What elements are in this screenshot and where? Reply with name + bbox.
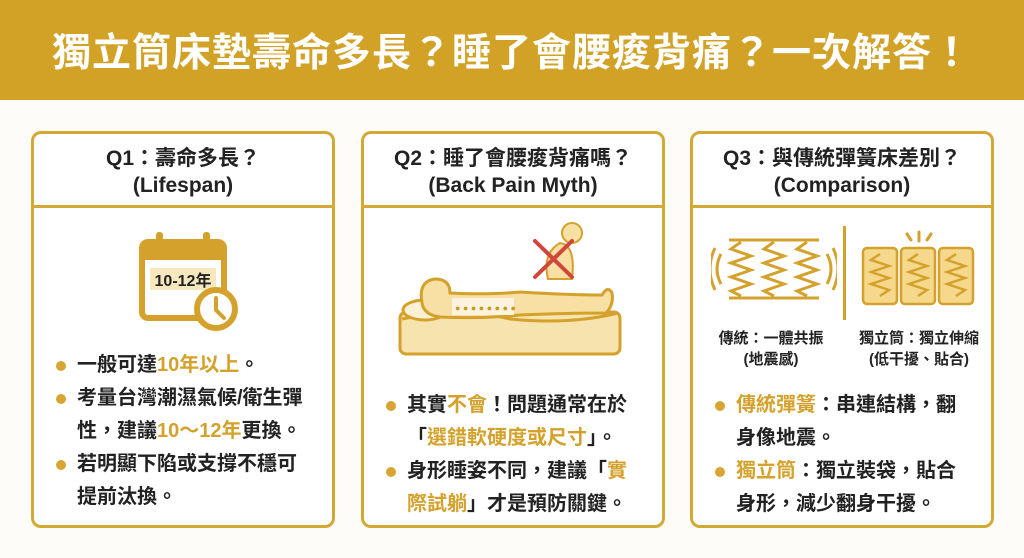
bullets Q3 [715,394,956,515]
panel heading Q3: Q3：與傳統彈簧床差別？ [723,147,961,170]
bullets Q2 [386,394,627,515]
panel: Q3 comparison [690,131,994,528]
icon: person lying on mattress [398,222,622,356]
bullets Q1: 考量台灣潮濕氣候/衛生彈 [77,387,303,409]
panel heading Q1 [34,134,332,208]
bullets Q3: 獨立筒：獨立裝袋，貼合 [736,460,956,482]
bullets Q1: 提前汰換。 [77,486,177,508]
header band [0,0,1024,100]
caption pocket: (低干擾、貼合) [869,351,969,368]
caption pocket [859,330,979,368]
bullets Q1: 若明顯下陷或支撐不穩可 [77,453,297,475]
panel: Q2 back pain [361,131,665,528]
panel heading Q3 [693,134,991,208]
divider [843,226,846,320]
caption traditional: 傳統：一體共振 [718,330,824,347]
panel heading Q1: Q1：壽命多長？ [106,147,260,170]
bullets Q1 [56,354,303,508]
bullets Q2: 際試躺」才是預防關鍵。 [407,493,627,515]
bullets Q2: 「選錯軟硬度或尺寸」。 [407,427,617,449]
bullets Q2: 身形睡姿不同，建議「實 [407,460,627,482]
panel heading Q2: Q2：睡了會腰痠背痛嗎？ [394,147,632,170]
bullets Q3: 身形，減少翻身干擾。 [736,493,936,515]
bullets Q1: 一般可達10年以上。 [77,354,259,376]
icon: traditional connected springs [711,238,837,300]
bullets Q2: 其實不會！問題通常在於 [407,394,627,416]
panel heading Q3: (Comparison) [774,174,910,197]
caption traditional: (地震感) [744,351,798,368]
icon: calendar with clock: 10-12年 [155,271,211,290]
bullets Q3: 身像地震。 [736,427,836,449]
panel heading Q2 [364,134,662,208]
panel heading Q2: (Back Pain Myth) [428,174,598,197]
icon: person lying on mattress: ● ● ● ● ● ● ● ● [455,303,516,313]
panel heading Q1: (Lifespan) [133,174,233,197]
caption traditional [718,330,824,368]
bullets Q3: 傳統彈簧：串連結構，翻 [736,394,956,416]
caption pocket: 獨立筒：獨立伸縮 [859,330,979,347]
title: 獨立筒床墊壽命多長？睡了會腰痠背痛？一次解答！ [52,32,972,75]
bullets Q1: 性，建議10～12年更換。 [77,420,302,442]
panel: Q1 lifespan [31,131,335,528]
icon: pocket springs [862,230,974,306]
icon: calendar with clock [139,232,238,331]
